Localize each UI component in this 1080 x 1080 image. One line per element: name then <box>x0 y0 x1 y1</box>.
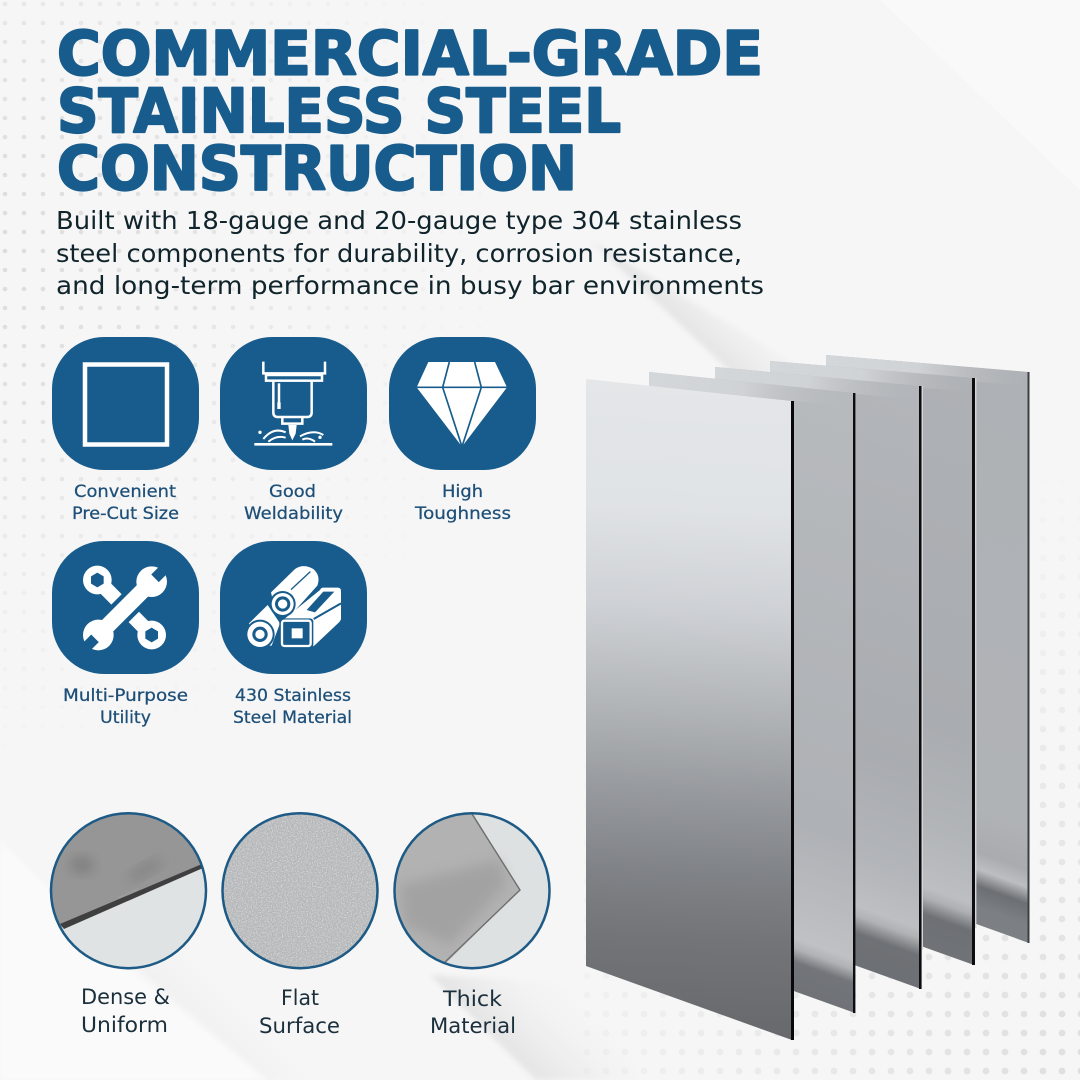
label: high toughness: Toughness <box>414 504 511 524</box>
icon: diamond <box>389 337 536 470</box>
label: 430 stainless steel material <box>233 686 352 728</box>
sheet 4 <box>770 361 976 965</box>
description text <box>56 206 764 300</box>
label: dense and uniform <box>81 985 170 1037</box>
label: dense and uniform: Uniform <box>81 1013 168 1037</box>
label: convenient pre-cut size: Convenient <box>74 482 176 502</box>
icon: crossed wrenches <box>52 541 199 674</box>
label: flat surface: Flat <box>281 986 319 1010</box>
feature: convenient pre-cut size <box>52 337 199 524</box>
label: convenient pre-cut size <box>72 482 179 524</box>
label: high toughness: High <box>442 482 483 502</box>
sheet 2 <box>649 372 855 1013</box>
label: thick material <box>430 987 516 1038</box>
photo circle: thick material <box>390 812 555 972</box>
icon: steel stock <box>220 541 367 674</box>
sheet 1: front <box>586 379 794 1040</box>
feature: good weldability <box>220 337 367 524</box>
sheet 3 <box>715 367 923 989</box>
title <box>57 18 763 204</box>
stainless steel sheets <box>586 355 1030 1040</box>
label: multi-purpose utility <box>63 686 188 728</box>
title: STAINLESS STEEL <box>57 76 621 147</box>
title: CONSTRUCTION <box>57 134 577 204</box>
label: flat surface: Surface <box>259 1014 340 1038</box>
label: good weldability <box>244 482 343 524</box>
description text: and long-term performance in busy bar environments <box>56 271 764 300</box>
description text: steel components for durability, corrosion resistance, <box>56 239 742 268</box>
photo circle: flat surface <box>220 812 380 972</box>
label: convenient pre-cut size: Pre-Cut Size <box>72 504 179 524</box>
feature: multi-purpose utility <box>52 541 199 728</box>
label: dense and uniform: Dense & <box>81 985 170 1009</box>
sheet 5 <box>826 355 1030 943</box>
label: 430 stainless steel material: Steel Material <box>233 708 352 728</box>
label: high toughness <box>414 482 511 524</box>
label: multi-purpose utility: Utility <box>100 708 151 728</box>
label: good weldability: Weldability <box>244 504 343 524</box>
feature: high toughness <box>389 337 536 524</box>
icon: square sheet <box>52 337 199 470</box>
photo circle: dense and uniform <box>50 812 210 972</box>
label: flat surface <box>259 986 340 1038</box>
label: thick material: Material <box>430 1014 516 1038</box>
label: multi-purpose utility: Multi-Purpose <box>63 686 188 706</box>
label: 430 stainless steel material: 430 Stainless <box>235 686 351 706</box>
label: thick material: Thick <box>442 987 503 1011</box>
title: COMMERCIAL-GRADE <box>57 18 763 90</box>
description text: Built with 18-gauge and 20-gauge type 304 stainless <box>56 206 742 235</box>
label: good weldability: Good <box>269 482 316 502</box>
icon: welding machine <box>220 337 367 470</box>
feature: 430 stainless steel material <box>220 541 367 728</box>
